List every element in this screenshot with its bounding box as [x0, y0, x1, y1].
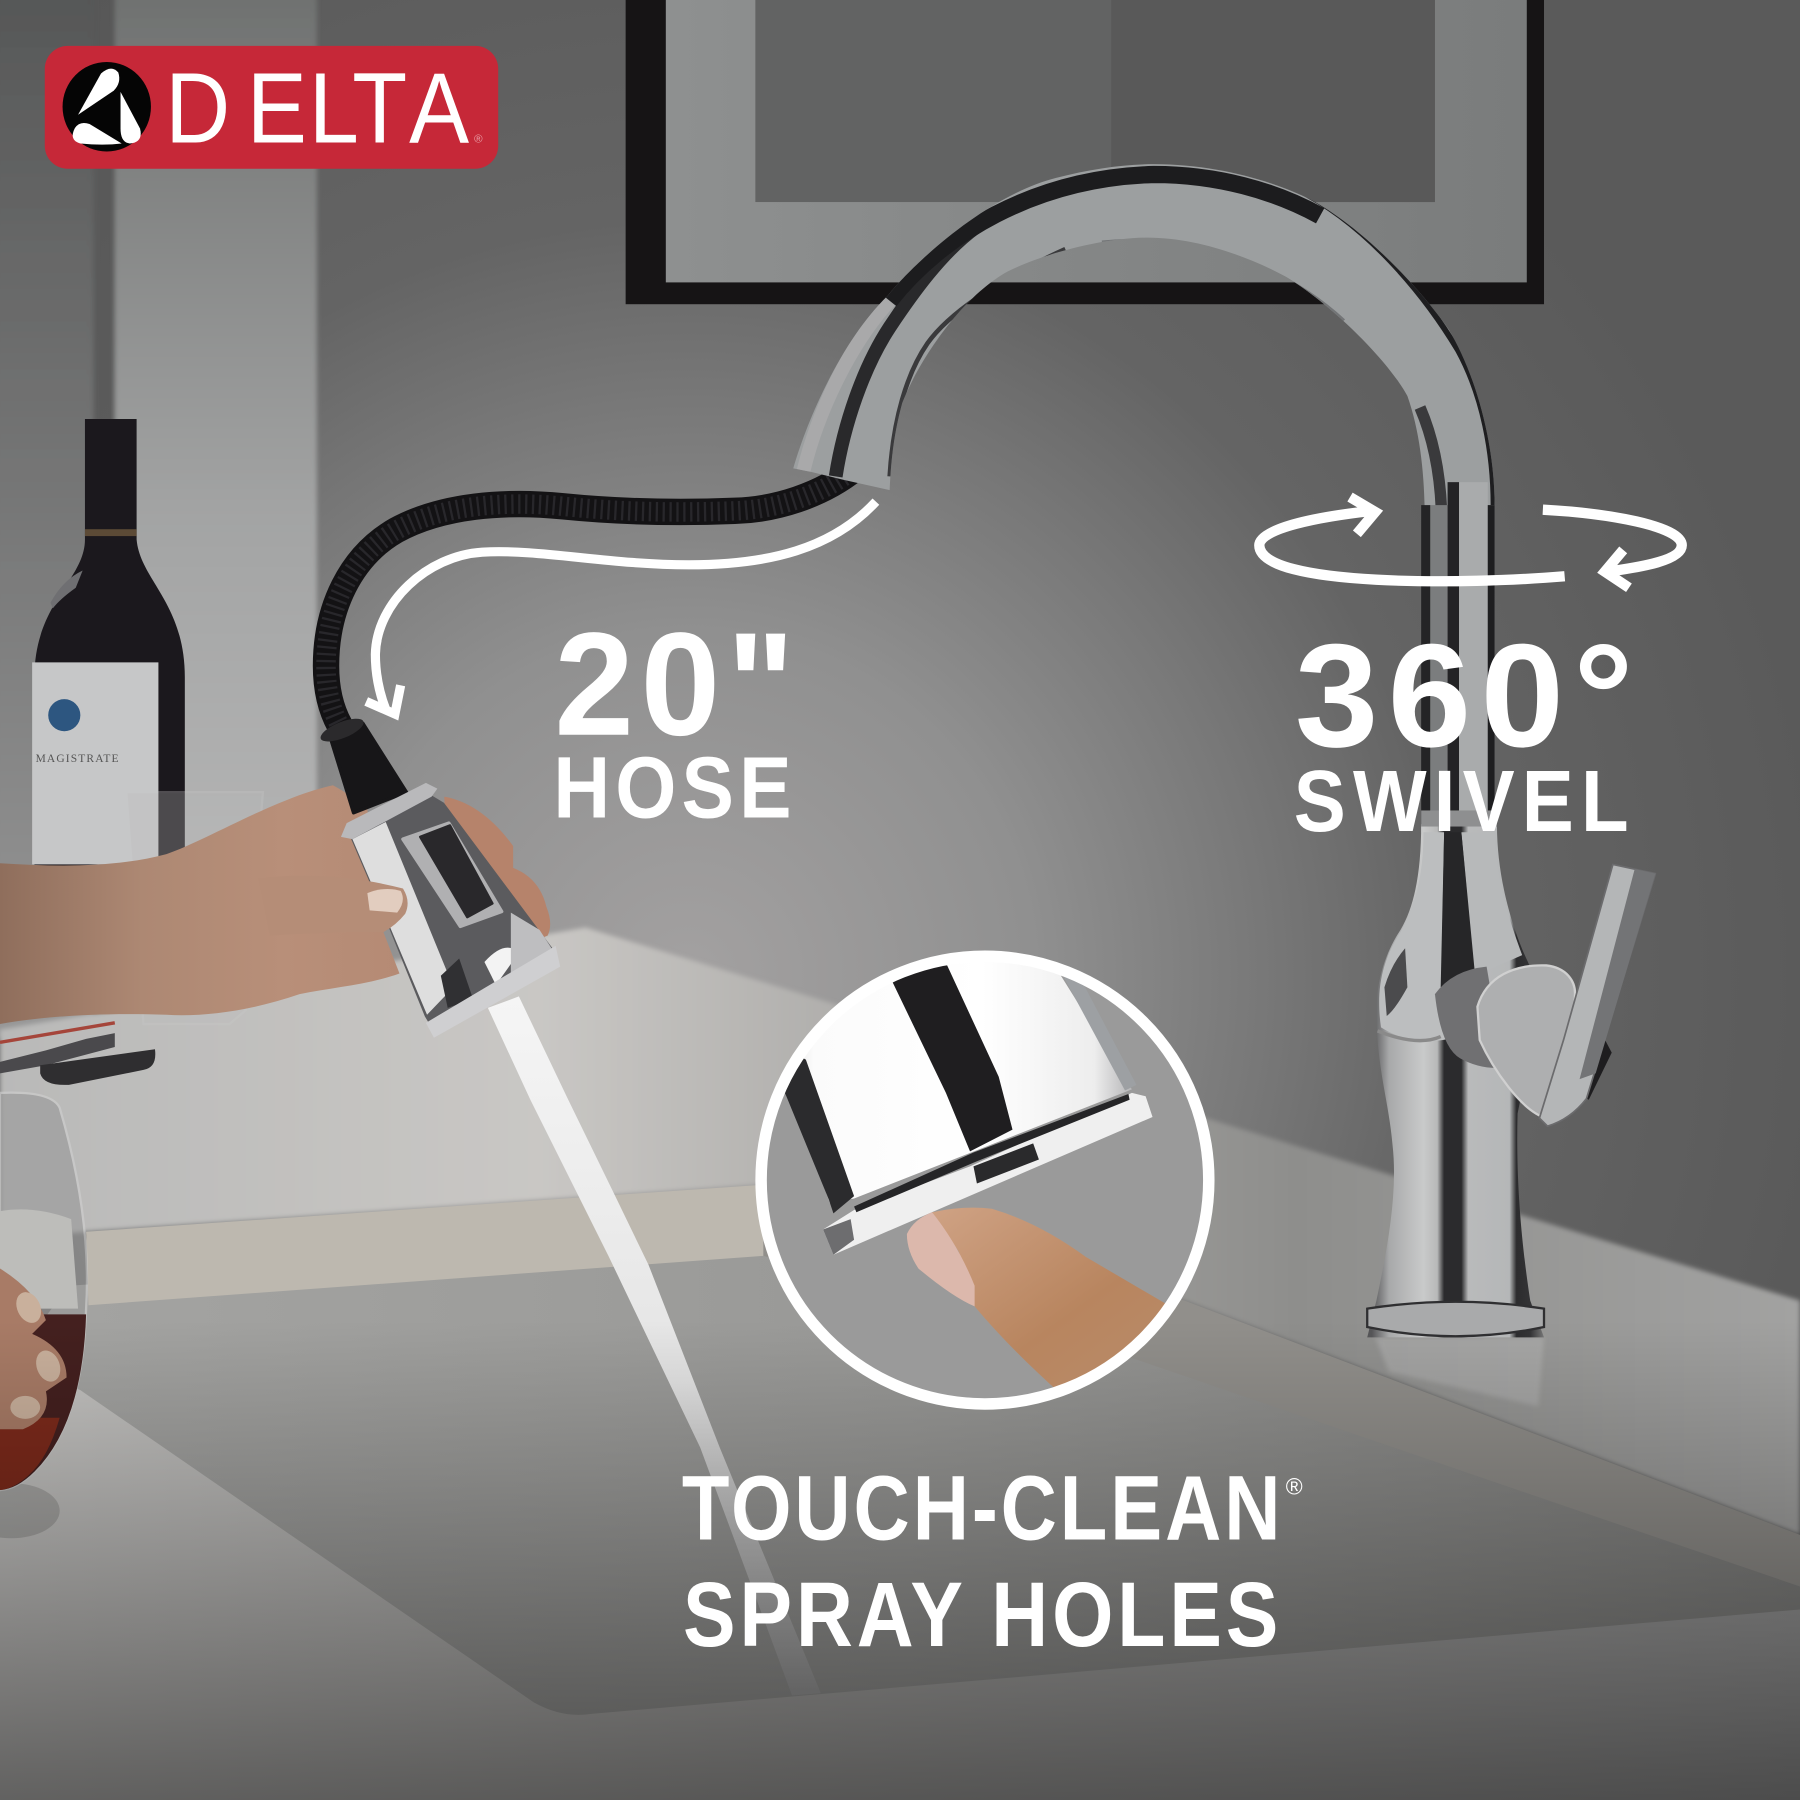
- faucet: neck and shoulder highlights: [1378, 810, 1522, 1041]
- logo: Delta: [45, 46, 498, 169]
- thumb: [258, 876, 408, 936]
- faucet: spout reflections: [804, 174, 1493, 528]
- background: countertop surface: [0, 928, 1800, 1535]
- thumb nail: [367, 889, 403, 913]
- background: left wall columns: [0, 0, 317, 1039]
- faucet: stem reflections: [1421, 482, 1495, 827]
- hose: [326, 468, 855, 726]
- sprayer rim bottom: [426, 946, 560, 1038]
- faucet: handle cap: [1477, 965, 1575, 1118]
- text: 360 degree swivel: 360°: [1295, 614, 1643, 778]
- faucet: spout and stem tube: [793, 164, 1495, 832]
- logo: Delta: ®: [474, 133, 483, 145]
- sprayer head: [341, 783, 560, 1038]
- arrows: 360 degree swivel: [1259, 497, 1682, 588]
- sprayer collar: [318, 714, 406, 813]
- background: faucet reflection in countertop: [1375, 1337, 1544, 1406]
- text: touch-clean spray holes: TOUCH-CLEAN: [682, 1457, 1283, 1559]
- faucet: base ring: [1367, 1302, 1544, 1336]
- logo mark: [63, 62, 151, 152]
- hand holding sprayer: arm and palm: [0, 785, 405, 1024]
- background: countertop front edge, sink side: [86, 1185, 763, 1305]
- sprayer rim top: [341, 783, 437, 839]
- faucet: body: [1367, 824, 1544, 1337]
- background: front countertop: [0, 1355, 1800, 1800]
- faucet: [793, 164, 1655, 1337]
- text: 360 degree swivel: [1294, 614, 1643, 850]
- sprayer button: [420, 825, 492, 917]
- faucet: lever back stop: [1573, 1031, 1612, 1100]
- text: 20 inch hose: 20": [554, 603, 801, 767]
- background: wine bottle: MAGISTRATE: [36, 753, 120, 765]
- water stream: [488, 996, 821, 1696]
- text: 20 inch hose: HOSE: [553, 739, 797, 836]
- hand holding sprayer: fingers behind: [444, 797, 550, 953]
- fingertip: [932, 1208, 1165, 1387]
- text: touch-clean spray holes: [682, 1457, 1303, 1666]
- text: 360 degree swivel: SWIVEL: [1294, 753, 1636, 850]
- background: wine bottle: [32, 419, 185, 872]
- faucet: lever: [1539, 864, 1655, 1126]
- text: 20 inch hose: [553, 603, 801, 836]
- logo: Delta: DELTA: [165, 53, 470, 164]
- background: scissors on counter: [0, 1023, 155, 1085]
- sprayer button bezel: [403, 823, 502, 926]
- shading overlay at bottom of photo: [0, 1320, 1800, 1800]
- fingernail: [907, 1212, 975, 1306]
- faucet: handle connector: [1435, 967, 1504, 1068]
- spray head close-up: [785, 962, 1165, 1387]
- callout: magnified touch-clean spray holes: [758, 918, 1209, 1404]
- background: water glass: [126, 792, 263, 1024]
- text: touch-clean spray holes: ®: [1286, 1474, 1303, 1500]
- background: countertop front edge, right side: [763, 1185, 1800, 1586]
- icon: wine glass with hand: [0, 1093, 87, 1538]
- arrow: 20 inch hose length: [366, 502, 876, 714]
- background: framed picture: [626, 0, 1544, 304]
- text: touch-clean spray holes: SPRAY HOLES: [683, 1564, 1282, 1666]
- background: sink basin: [0, 1240, 1800, 1800]
